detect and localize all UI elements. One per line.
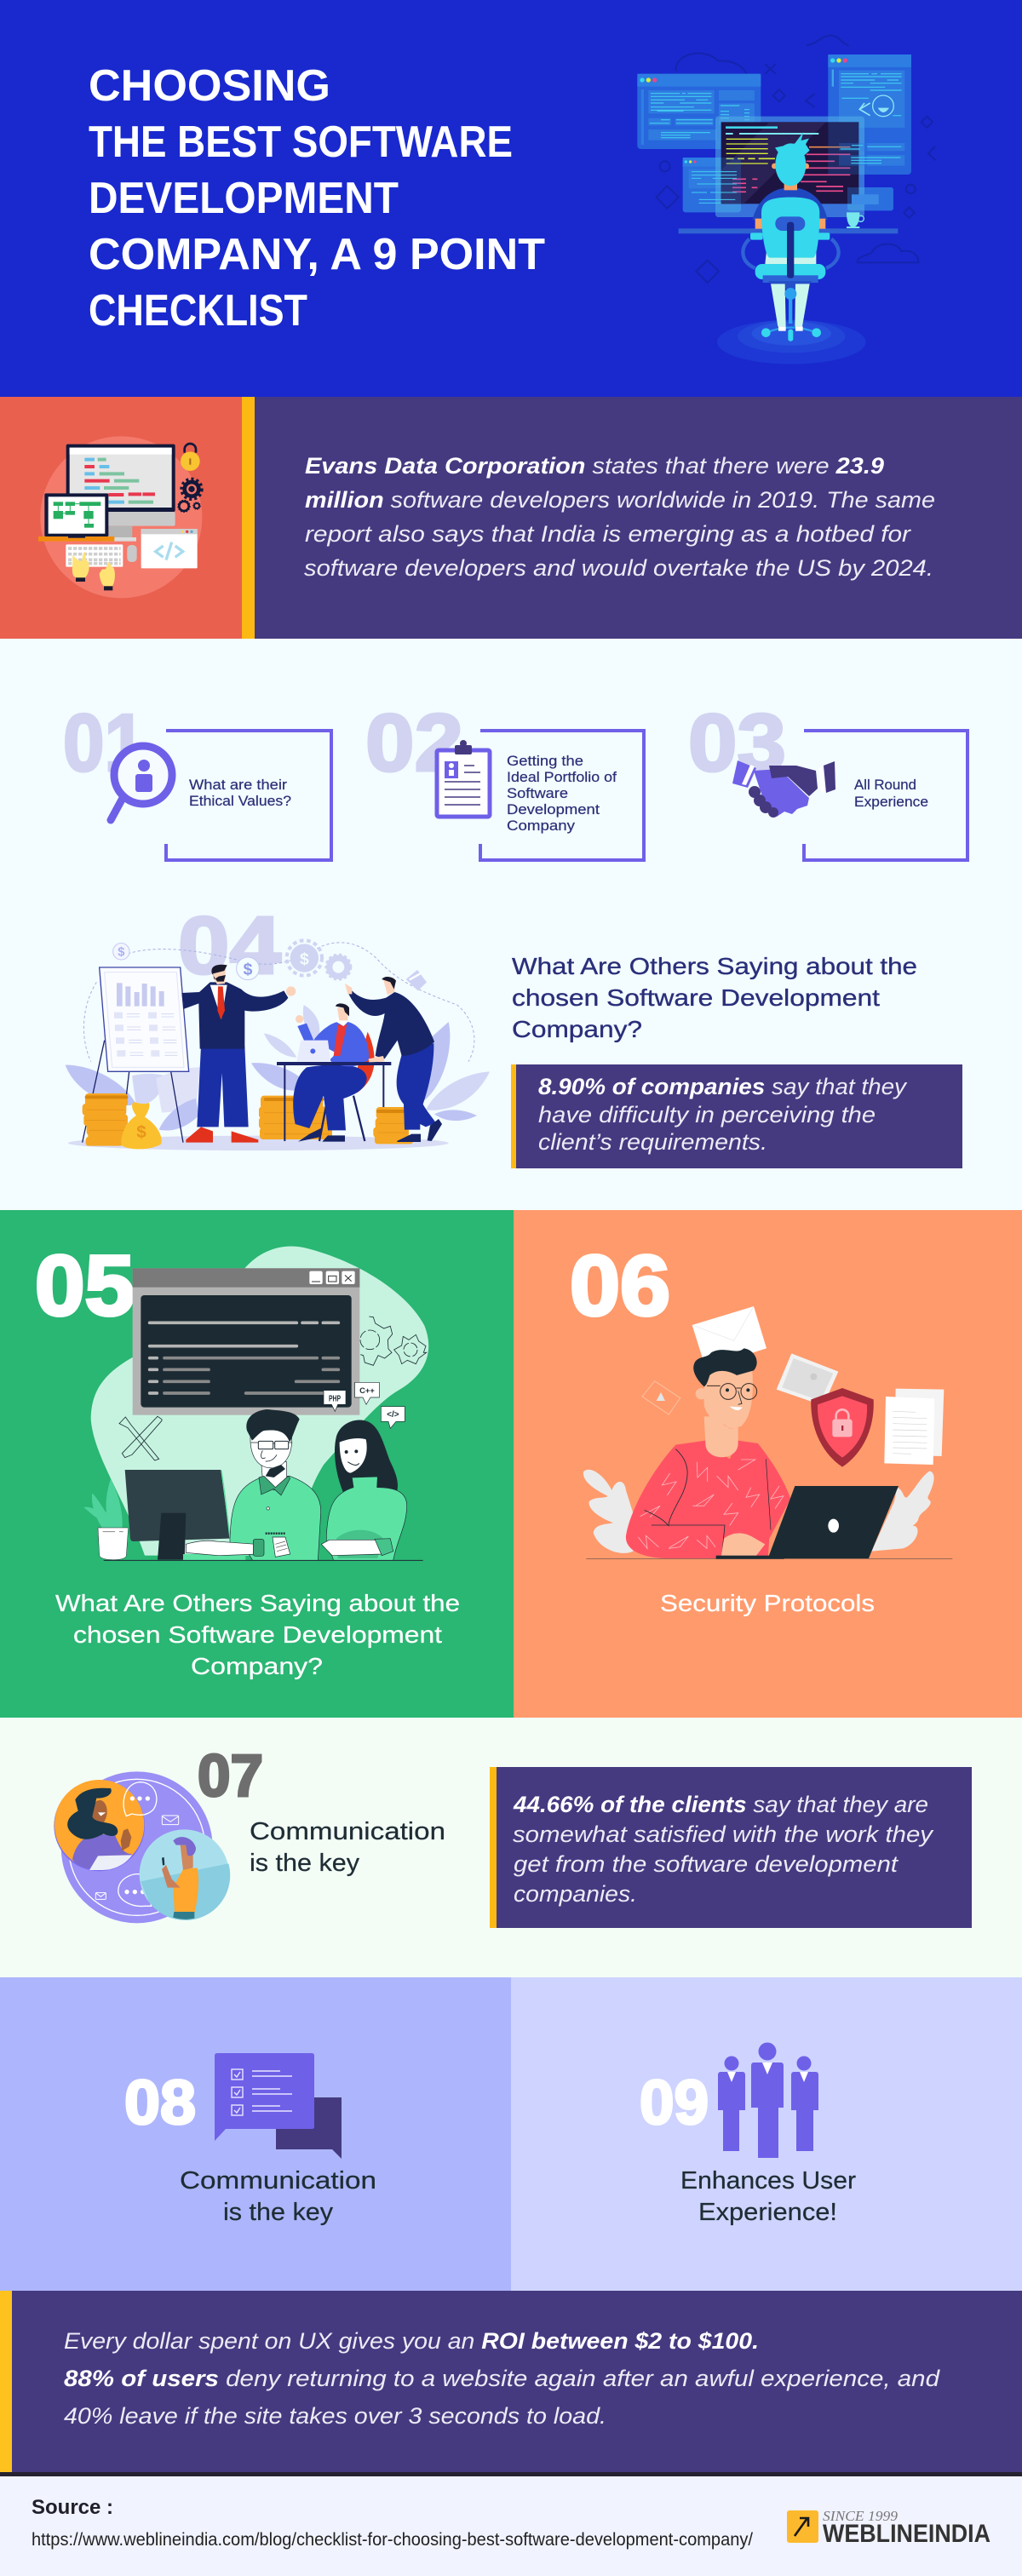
frame (804, 731, 967, 860)
title: COMPANY, A 9 POINT (89, 230, 545, 279)
icon: two people chatting (54, 1771, 230, 1923)
coins and money bag (83, 1093, 413, 1149)
label: Software (507, 786, 568, 801)
label: All Round (854, 777, 916, 793)
laptop (716, 1486, 899, 1559)
callout: 44.66% of the clients: get from the software development (514, 1851, 899, 1877)
callout: 8.90% of companies: have difficulty in perceiving the (538, 1102, 876, 1127)
source: https://www.weblineindia.com/blog/checklist-for-choosing-best-software-development-company/ (32, 2530, 753, 2550)
intro statistic text (304, 453, 935, 581)
item 08 label: is the key (223, 2199, 334, 2226)
item 07 label: Communication (250, 1818, 445, 1845)
frame (480, 731, 644, 860)
leaves (66, 1005, 490, 1131)
woman developer (321, 1420, 407, 1560)
number 01: 01 (63, 697, 146, 789)
centre monitor (715, 117, 864, 217)
right window (828, 55, 911, 175)
hero illustration: developer at holographic screens (637, 36, 935, 364)
label: Development (507, 802, 600, 818)
item 05 label: Company? (191, 1653, 323, 1679)
label (507, 754, 617, 834)
number 07: 07 (198, 1742, 263, 1809)
shield (811, 1388, 874, 1467)
code bubbles (324, 1382, 405, 1428)
label: Ideal Portfolio of (507, 770, 617, 785)
item 05 label: What Are Others Saying about the (55, 1590, 460, 1616)
intro statistic text: Evans Data Corporation states that there were 23.9 (305, 453, 884, 479)
label: Ethical Values? (189, 794, 291, 809)
tools (119, 1416, 162, 1460)
source (32, 2496, 753, 2550)
title: CHOOSING (89, 61, 330, 111)
callout: 8.90% of companies: client’s requirements. (538, 1129, 767, 1155)
translucent window overlays on the monitor (692, 122, 901, 204)
callout: 44.66% of the clients: somewhat satisfied with the work they (513, 1822, 934, 1847)
item 02 (365, 697, 644, 860)
bottom statistics band: Every dollar spent on UX gives you an ROI between $2 to $100. (64, 2328, 759, 2354)
icon: three business people (718, 2042, 818, 2158)
intro band (0, 397, 1022, 639)
number 02: 02 (365, 697, 463, 789)
intro statistic text: report also says that India is emerging as a hotbed for (305, 521, 911, 547)
item 09 label: Experience! (698, 2199, 837, 2226)
item 08 label: Communication (180, 2167, 376, 2194)
desk (679, 228, 898, 233)
dashed path and small icons: $ (300, 950, 309, 968)
plant and pot (83, 1479, 129, 1560)
coral panel (0, 397, 242, 639)
developer on chair (743, 132, 839, 341)
frame (166, 731, 331, 860)
item 04 heading (512, 953, 917, 1042)
man in teal circle (140, 1829, 230, 1920)
title: CHECKLIST (89, 286, 307, 336)
item 01 (63, 697, 331, 860)
logo: Weblineindia (787, 2508, 990, 2548)
presenter (181, 965, 296, 1143)
code window (133, 1268, 359, 1415)
intro statistic text: million software developers worldwide in 2019. The same (305, 487, 935, 513)
video card (642, 1381, 680, 1414)
small right window base (847, 187, 893, 210)
item 09 label (680, 2167, 856, 2226)
callout: 8.90% of companies (511, 1064, 962, 1168)
number 09: 09 (640, 2068, 709, 2137)
label (189, 777, 291, 809)
purple panel (255, 397, 1022, 639)
title: DEVELOPMENT (89, 174, 399, 223)
callout: 44.66% of the clients: companies. (514, 1881, 637, 1907)
illustration 05 backdrop blob (91, 1246, 428, 1556)
dashed path and small icons (83, 940, 474, 1062)
left window (637, 74, 761, 149)
logo: Weblineindia: WEBLINEINDIA (823, 2520, 990, 2548)
callout: 8.90% of companies: 8.90% of companies say that they (538, 1074, 908, 1099)
gears (360, 1317, 427, 1365)
intro statistic text: software developers and would overtake the US by 2024. (304, 555, 933, 581)
ground (68, 1136, 449, 1150)
leaves (583, 1470, 934, 1553)
item 04 heading: What Are Others Saying about the (512, 953, 917, 979)
item 05 label: chosen Software Development (73, 1621, 442, 1648)
coins and money bag: $ (136, 1122, 146, 1142)
woman in orange circle (54, 1780, 145, 1871)
item 03 (688, 697, 967, 860)
item 08 label (180, 2167, 376, 2226)
monitor (125, 1470, 245, 1560)
speech bubbles (118, 1782, 157, 1907)
logo: Weblineindia: SINCE 1999 (823, 2508, 899, 2524)
documents (884, 1389, 944, 1465)
code bubbles: PHP (329, 1394, 341, 1403)
callout: 44.66% of the clients (490, 1767, 972, 1928)
small left window base (683, 158, 741, 212)
item 06 label: Security Protocols (660, 1590, 875, 1616)
bottom statistics band: 88% of users deny returning to a website again after an awful experience, and (64, 2366, 940, 2391)
floating envelope (692, 1306, 766, 1368)
label: Getting the (507, 754, 583, 769)
icon: desktop and laptop coding (38, 436, 202, 598)
source: Source : (32, 2496, 113, 2519)
label: Company (507, 818, 576, 834)
dashed path and small icons: $ (244, 961, 253, 978)
icon: clipboard profile (437, 740, 490, 817)
code bubbles: </> (387, 1410, 399, 1420)
man developer (186, 1409, 321, 1560)
number 05: 05 (35, 1238, 135, 1334)
envelopes (95, 1816, 179, 1899)
illustration: two developers at a computer (83, 1268, 427, 1560)
chart board (83, 967, 189, 1143)
number 06: 06 (570, 1238, 670, 1334)
dashed path and small icons: $ (118, 946, 124, 960)
item 04 heading: chosen Software Development (512, 984, 880, 1011)
item 07 label: is the key (250, 1850, 360, 1877)
icon: magnifier with person (111, 746, 172, 820)
number 03: 03 (688, 697, 786, 789)
floating image card (777, 1353, 838, 1406)
icon: handshake (732, 760, 835, 818)
seated man and chair (293, 1003, 375, 1142)
coffee cup (847, 212, 864, 228)
callout: 44.66% of the clients: 44.66% of the clients say that they are (513, 1792, 928, 1817)
number 08: 08 (124, 2068, 196, 2137)
title: THE BEST SOFTWARE (89, 118, 513, 167)
number 04: 04 (178, 900, 281, 991)
illustration: developer with security shield (583, 1306, 952, 1559)
floor glow (717, 320, 866, 364)
bottom statistics band: 40% leave if the site takes over 3 seconds to load. (64, 2403, 606, 2429)
standing man leaning (345, 977, 442, 1142)
label: What are their (189, 777, 288, 793)
title (89, 61, 545, 336)
illustration: business meeting with coins (66, 940, 490, 1150)
icon: chat bubbles with checklist (215, 2053, 342, 2159)
label: Experience (854, 795, 928, 810)
ground line (104, 1559, 423, 1562)
item 07 label (250, 1818, 445, 1877)
item 09 label: Enhances User (680, 2167, 856, 2194)
code bubbles: C++ (359, 1386, 375, 1395)
table line (586, 1558, 952, 1560)
table (277, 1062, 391, 1141)
label (854, 777, 928, 810)
item 05 label (55, 1590, 460, 1679)
yellow divider (242, 397, 255, 639)
man with sweater (626, 1348, 790, 1558)
item 04 heading: Company? (512, 1016, 642, 1042)
bottom statistics band (0, 2291, 1022, 2476)
